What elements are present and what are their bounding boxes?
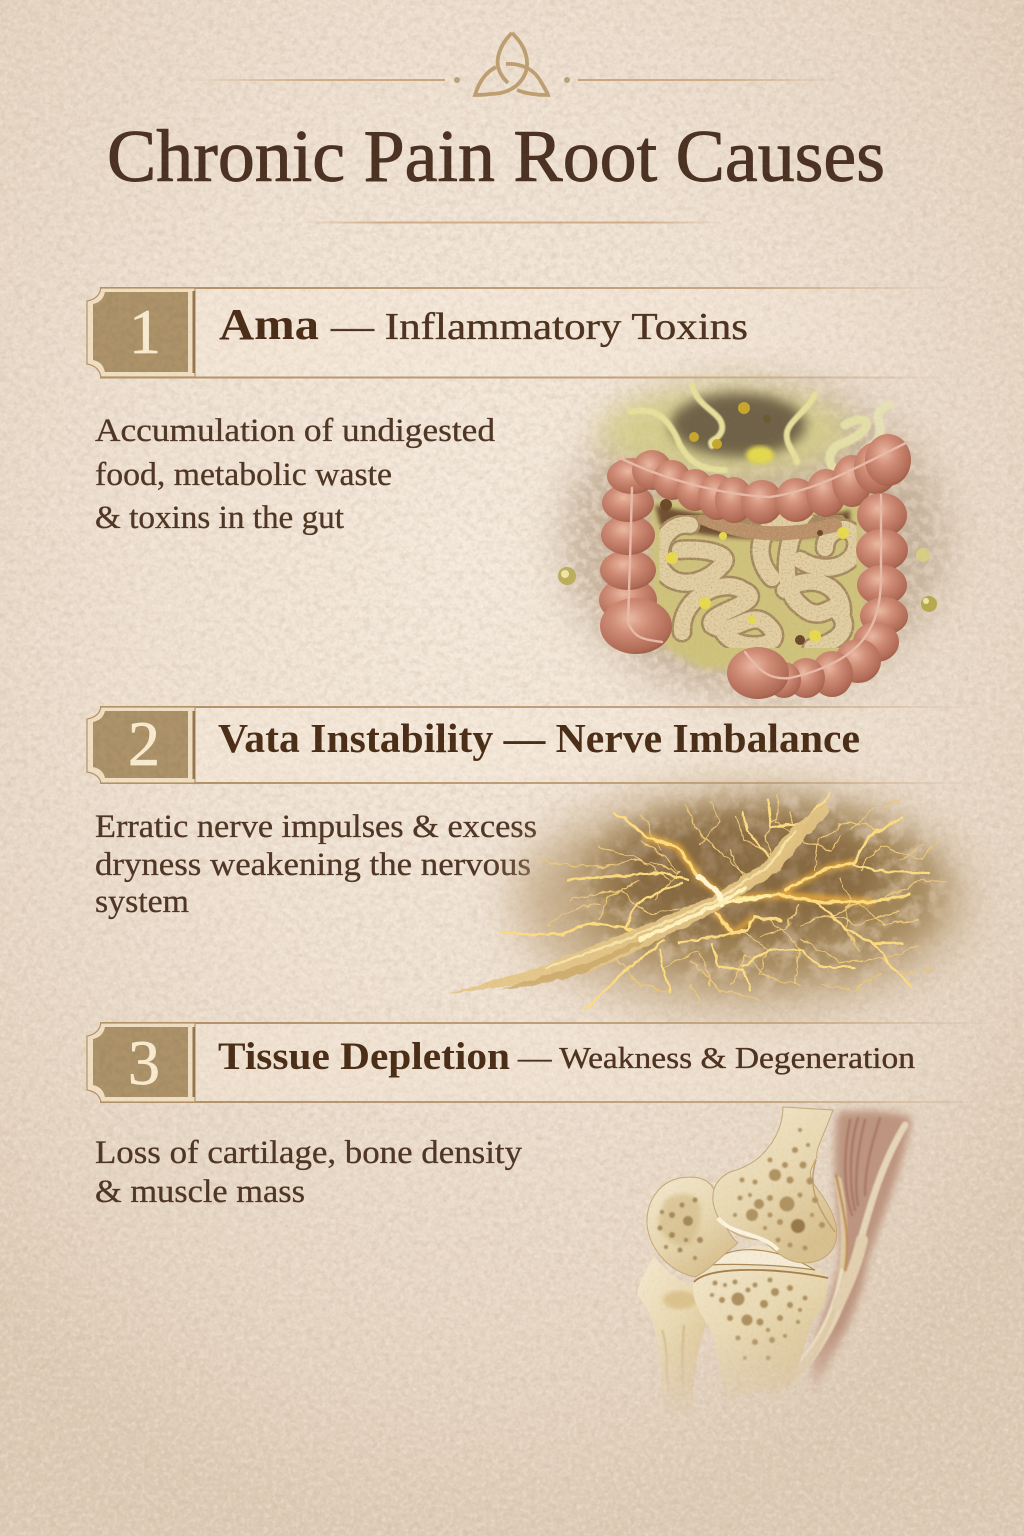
section 1 body text: food, metabolic waste: [95, 457, 392, 493]
section 2 body text: system: [95, 884, 189, 920]
illustration: knee joint: [637, 1107, 912, 1415]
toxic haze above colon: [630, 385, 890, 470]
section 2 body text: Erratic nerve impulses & excess: [95, 809, 537, 845]
section 2 body text: dryness weakening the nervous: [95, 847, 531, 883]
section 3 body text: Loss of cartilage, bone density: [95, 1135, 523, 1171]
badge 1: [87, 288, 195, 377]
badge 1: 1: [129, 296, 161, 367]
nerve trunk: [447, 804, 830, 994]
badge 3: 3: [128, 1027, 160, 1098]
tibia: [693, 1245, 828, 1400]
section 1 body text: [95, 413, 495, 536]
section 1 body text: & toxins in the gut: [95, 500, 344, 536]
nerve glow: [640, 830, 871, 938]
main nerve branches: [502, 793, 930, 1010]
heading 3: — Weakness & Degeneration: [517, 1040, 916, 1075]
fine nerve branches: [540, 795, 945, 1000]
large colon: [599, 434, 911, 699]
illustration: glowing nerve network: [447, 792, 965, 1010]
illustration: inflamed intestines: [558, 385, 945, 699]
heading 1: — Inflammatory Toxins: [330, 306, 748, 348]
small intestine bed: [650, 499, 868, 672]
muscle and tendons: [765, 1111, 912, 1395]
section 3 body text: & muscle mass: [95, 1174, 305, 1210]
title: Chronic Pain Root Causes: [107, 116, 885, 198]
fibula: [637, 1256, 706, 1415]
section 1 banner: [87, 287, 960, 378]
section 3 body text: [95, 1135, 523, 1210]
badge 3: [87, 1023, 195, 1102]
section 3 banner: [87, 1022, 1000, 1103]
section 2 banner: [87, 706, 980, 784]
floating toxin droplets: [558, 548, 937, 612]
section 2 body text: [95, 809, 537, 920]
heading 2: Vata Instability — Nerve Imbalance: [218, 715, 860, 761]
femur: [713, 1107, 837, 1263]
patella: [647, 1177, 738, 1277]
badge 2: 2: [128, 708, 160, 779]
heading 3: [218, 1035, 916, 1078]
title divider: [300, 222, 725, 224]
heading 3: Tissue Depletion: [218, 1035, 510, 1078]
section 1 body text: Accumulation of undigested: [95, 413, 495, 449]
icon: triquetra knot: [475, 33, 548, 95]
heading 1: Ama: [219, 300, 319, 349]
header ornament: [190, 33, 843, 95]
heading 1: [219, 300, 748, 349]
badge 2: [87, 707, 195, 783]
